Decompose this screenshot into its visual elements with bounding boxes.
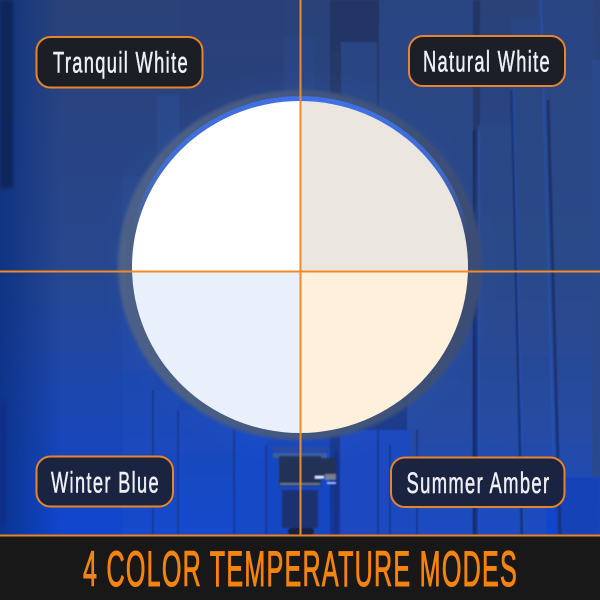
label: Tranquil White: Tranquil White (53, 46, 189, 80)
lamp inner blue rim (128, 96, 472, 436)
label: Summer Amber (391, 458, 564, 507)
label: Tranquil White (36, 37, 202, 88)
lamp ring (118, 90, 482, 440)
icon: lamp stand and ball head (272, 447, 336, 535)
quadrant: natural white (300, 95, 470, 271)
acoustic panels behind the lamp (122, 0, 600, 535)
label: Winter Blue: Winter Blue (51, 466, 160, 500)
quadrant: winter blue (130, 271, 300, 436)
quadrant: tranquil white (130, 95, 300, 271)
title bar (0, 534, 600, 600)
vertical orange divider (300, 0, 302, 536)
lamp glow (100, 67, 500, 467)
lamp face: four colour temperature quadrants (130, 95, 470, 436)
label: Winter Blue (36, 456, 173, 506)
horizontal orange divider (0, 270, 600, 272)
quadrant: summer amber (300, 271, 470, 436)
label: Natural White (409, 36, 565, 86)
